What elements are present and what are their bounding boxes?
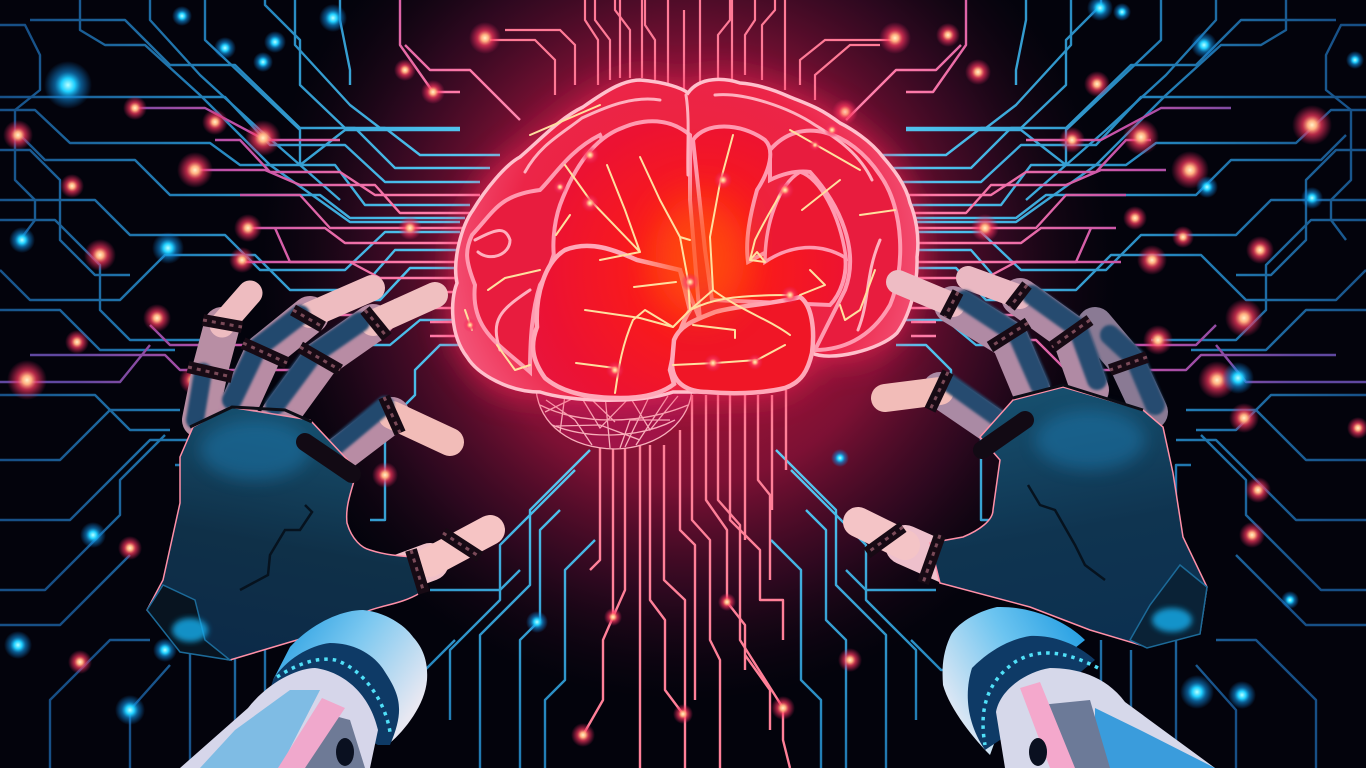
vertical pink circuit lines below brain — [583, 390, 790, 768]
right knuckle band — [1013, 385, 1143, 410]
right palm — [930, 387, 1207, 647]
right robotic hand — [858, 278, 1207, 648]
right forearm pink stripe — [1020, 682, 1075, 768]
left fingers — [200, 288, 490, 575]
top pink circuit lines — [490, 0, 895, 100]
right forearm white band — [996, 668, 1215, 768]
brain glowing veins — [465, 105, 895, 393]
left wrist mechanics — [147, 585, 230, 660]
brain upper right central lobe — [693, 126, 846, 305]
right wrist light — [1152, 608, 1192, 632]
brain central glow — [655, 195, 745, 315]
brain fold lines — [475, 95, 880, 350]
brain outer glow — [452, 80, 917, 400]
right palm highlight — [1035, 410, 1145, 470]
brain lower left lobe — [533, 246, 690, 398]
left forearm white band — [180, 668, 378, 768]
right forearm dark band — [968, 636, 1095, 750]
left forearm cuff — [273, 610, 427, 743]
left finger dark upper shading — [195, 315, 385, 455]
right forearm port — [1029, 738, 1047, 766]
right wrist mechanics — [1130, 565, 1207, 648]
brain right temporal lobe — [770, 131, 900, 350]
right palm circuit detail — [1028, 485, 1105, 580]
left forearm dark band — [270, 643, 399, 745]
brain upper left central lobe — [553, 121, 700, 320]
pink circuit lines right (mirrored) — [846, 0, 1366, 382]
left forearm grey panel — [300, 712, 365, 768]
brain right inner lobe — [765, 172, 846, 262]
left forearm port — [336, 738, 354, 766]
brain glowing vein nodes — [463, 122, 840, 379]
pink circuit lines left — [0, 0, 520, 382]
blue circuit lines left — [0, 0, 595, 768]
left forearm light ring — [277, 659, 390, 732]
brain — [452, 79, 918, 400]
brain silhouette — [453, 79, 918, 400]
left palm — [147, 407, 420, 660]
brain left temporal lobe — [467, 135, 604, 372]
right forearm grey panel — [1040, 700, 1110, 768]
right forearm light ring — [983, 653, 1098, 745]
left forearm pink stripe — [278, 698, 345, 768]
right forearm cuff — [943, 607, 1085, 755]
left finger ring detail — [188, 310, 480, 593]
left palm circuit detail — [240, 505, 312, 590]
left knuckle band — [190, 407, 312, 427]
left robotic hand — [147, 288, 490, 660]
right fingers — [858, 278, 1150, 565]
left finger rings — [188, 310, 480, 593]
right finger dark upper shading — [948, 295, 1155, 425]
left robotic forearm — [180, 610, 427, 768]
cerebellum wireframe — [536, 386, 692, 449]
right finger rings — [867, 285, 1147, 583]
left thumb base joint — [305, 442, 352, 474]
left forearm body panels — [200, 690, 320, 768]
right forearm blue panel — [1095, 708, 1215, 768]
right thumb base joint — [982, 420, 1025, 450]
right finger ring detail — [867, 285, 1147, 583]
right robotic forearm — [943, 607, 1215, 768]
brain lower centre lobe — [672, 297, 813, 393]
blue circuit lines right (mirrored) — [771, 0, 1366, 768]
left wrist light — [172, 618, 208, 642]
left palm highlight — [200, 420, 310, 480]
